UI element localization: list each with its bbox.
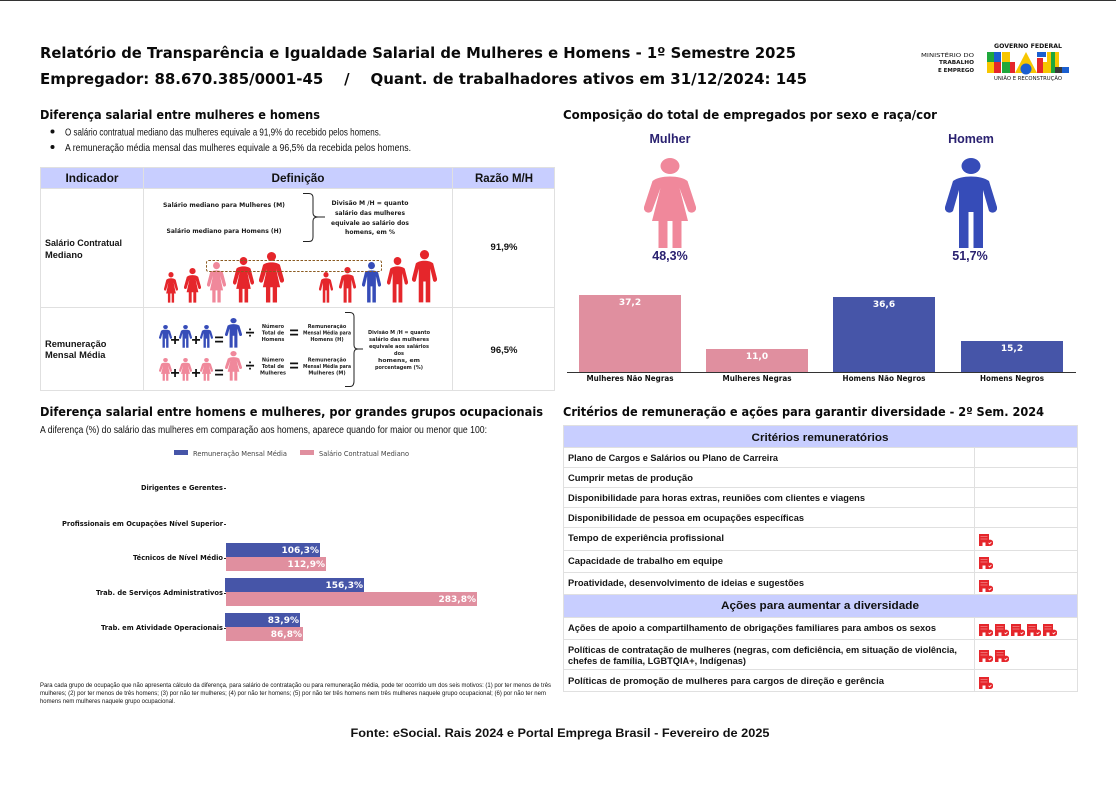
horizontal bar chart: grupos ocupacionais: 283,8%: [438, 595, 476, 605]
formula: remuneração média: Número: [262, 323, 285, 330]
heading: diferença salarial: Diferença salarial entre mulheres e homens: [40, 107, 320, 122]
bullet text block: A remuneração média mensal das mulheres equivale a 96,5% da recebida pelos homens.: [65, 143, 411, 154]
horizontal bar chart: grupos ocupacionais: [62, 484, 477, 641]
formula: remuneração média: +: [170, 332, 180, 349]
formula: remuneração média: +: [191, 365, 201, 382]
formula: remuneração média: =: [214, 332, 224, 349]
title: Empregador: 88.670.385/0001-45 / Quant. de trabalhadores ativos em 31/12/2024: 145: [40, 70, 807, 88]
panel: criteria table: Políticas de contratação de mulheres (negras, com deficiência, em situação de violência,: [568, 645, 957, 655]
bullet text block: O salário contratual mediano das mulheres equivale a 91,9% do recebido pelos homens.: [65, 128, 381, 138]
woman composition: Mulher: [650, 132, 691, 146]
horizontal bar chart: grupos ocupacionais: 112,9%: [288, 560, 325, 570]
heading: critérios: Critérios de remuneração e ações para garantir diversidade - 2º Sem. 2024: [563, 404, 1044, 419]
panel: indicator table: Remuneração: [45, 339, 107, 349]
definition text: salário mediano: homens, em %: [345, 229, 395, 236]
definition text: salário mediano: salário das mulheres: [335, 210, 405, 217]
horizontal bar chart: grupos ocupacionais: Técnicos de Nível Médio: [133, 554, 223, 562]
legend: Remuneração Mensal Média: [193, 450, 287, 458]
horizontal bar chart: grupos ocupacionais: Dirigentes e Gerentes: [141, 484, 223, 492]
panel: criteria table: Disponibilidade de pessoa em ocupações específicas: [568, 513, 804, 523]
heading: grupos ocupacionais: Diferença salarial entre homens e mulheres, por grandes grupos ocupacionais: [40, 404, 543, 419]
formula: remuneração média: =: [289, 325, 299, 342]
legend: Salário Contratual Mediano: [319, 450, 409, 458]
horizontal bar chart: grupos ocupacionais: Trab. de Serviços Administrativos: [96, 589, 223, 597]
formula: remuneração média: homens, em: [378, 358, 420, 364]
footnote: Para cada grupo de ocupação que não apresenta cálculo da diferença, para salário de contratação ou para remuneração média, pode ter ocorrido um dos seis motivos: (1) por ter menos de três: [40, 682, 552, 689]
bullet text block: [50, 128, 411, 154]
formula: remuneração média: +: [191, 332, 201, 349]
panel: criteria table: Plano de Cargos e Salários ou Plano de Carreira: [568, 453, 779, 463]
panel: criteria table: Proatividade, desenvolvimento de ideias e sugestões: [568, 578, 804, 588]
bar chart: sexo e raça: 37,2: [619, 298, 641, 308]
formula: remuneração média: salário das mulheres: [369, 336, 429, 343]
man composition: Homem: [948, 132, 994, 146]
formula: remuneração média: Mensal Média para: [303, 363, 351, 370]
footnote: [40, 682, 552, 705]
footnote: homens nem mulheres naquele grupo ocupacional.: [40, 698, 175, 705]
formula: remuneração média: [159, 312, 431, 386]
definition text: salário mediano: Divisão M /H = quanto: [332, 200, 408, 207]
bar chart: sexo e raça: Mulheres Negras: [722, 374, 792, 383]
definition text: salário mediano: equivale ao salário dos: [331, 220, 409, 227]
panel: indicator table: [40, 167, 555, 391]
panel: indicator table: Mensal Média: [45, 350, 106, 360]
woman composition: 48,3%: [652, 249, 688, 263]
panel: criteria table: [563, 425, 1078, 692]
formula: remuneração média: Número: [262, 356, 285, 364]
panel: criteria table: Políticas de promoção de mulheres para cargos de direção e gerência: [568, 676, 885, 686]
panel: criteria table: Capacidade de trabalho em equipe: [568, 556, 723, 566]
formula: remuneração média: Mulheres (M): [308, 370, 346, 376]
logo: ministério and governo federal: GOVERNO FEDERAL: [994, 43, 1062, 50]
panel: criteria table: Ações de apoio a compartilhamento de obrigações familiares para ambos os sexos: [568, 623, 936, 633]
definition text: salário mediano: Salário mediano para Homens (H): [166, 228, 282, 235]
panel: criteria table: Cumprir metas de produção: [568, 473, 693, 483]
panel: indicator table: Mediano: [45, 250, 83, 260]
bar chart: sexo e raça: Homens Negros: [980, 374, 1045, 383]
panel: indicator table: Definição: [272, 173, 324, 185]
panel: indicator table: 96,5%: [491, 345, 518, 356]
formula: remuneração média: Homens: [262, 337, 284, 343]
horizontal bar chart: grupos ocupacionais: 86,8%: [271, 630, 302, 640]
formula: remuneração média: Remuneração: [308, 358, 347, 364]
horizontal bar chart: grupos ocupacionais: Trab. em Atividade Operacionais: [101, 624, 223, 632]
formula: remuneração média: equivale aos salários: [369, 343, 429, 350]
horizontal bar chart: grupos ocupacionais: 156,3%: [326, 581, 363, 591]
bar chart: sexo e raça: Mulheres Não Negras: [586, 374, 674, 383]
title: [40, 44, 807, 88]
panel: criteria table: chefes de família, LGBTQIA+, Indígenas): [568, 656, 746, 666]
panel: indicator table: Salário Contratual: [45, 238, 122, 248]
woman composition: [644, 132, 696, 263]
footnote: mulheres; (2) por ter menos de três homens; (3) por não ter mulheres; (4) por não ter homens; (5) por não ter três homens nem três mulheres naquele grupo ocupacional; (6) por não ter nem: [40, 690, 546, 697]
logo: ministério and governo federal: E EMPREGO: [938, 68, 974, 74]
horizontal bar chart: grupos ocupacionais: 106,3%: [282, 546, 319, 556]
panel: indicator table: 91,9%: [491, 242, 518, 253]
bar chart: sexo e raça: 11,0: [746, 352, 768, 362]
bar chart: sexo e raça: Homens Não Negros: [842, 374, 926, 383]
panel: indicator table: Indicador: [66, 173, 119, 185]
horizontal bar chart: grupos ocupacionais: Profissionais em Ocupações Nível Superior: [62, 520, 224, 528]
formula: remuneração média: Divisão M /H = quanto: [368, 330, 431, 336]
formula: remuneração média: Total de: [262, 364, 285, 370]
formula: remuneração média: Total de: [262, 330, 285, 336]
title: Relatório de Transparência e Igualdade Salarial de Mulheres e Homens - 1º Semestre 2025: [40, 44, 796, 62]
icons: company marks: [979, 534, 1057, 689]
formula: remuneração média: ÷: [246, 358, 255, 375]
subheading text: A diferença (%) do salário das mulheres em comparação aos homens, aparece quando for maior ou menor que 100:: [40, 425, 487, 436]
logo: ministério and governo federal: [921, 43, 1069, 82]
panel: criteria table: Disponibilidade para horas extras, reuniões com clientes e viagens: [568, 493, 865, 503]
icon row: women and men ordered by salary: [164, 250, 437, 303]
source: Fonte: eSocial. Rais 2024 e Portal Emprega Brasil - Fevereiro de 2025: [350, 726, 770, 740]
formula: remuneração média: Remuneração: [308, 324, 347, 330]
bar chart: sexo e raça: 36,6: [873, 300, 895, 310]
panel: criteria table: Critérios remuneratórios: [752, 432, 888, 444]
formula: remuneração média: ÷: [246, 325, 255, 342]
man composition: 51,7%: [952, 249, 988, 263]
definition text: salário mediano: Salário mediano para Mulheres (M): [163, 202, 285, 209]
logo: ministério and governo federal: UNIÃO E RECONSTRUÇÃO: [994, 75, 1062, 82]
panel: criteria table: Ações para aumentar a diversidade: [721, 600, 919, 612]
panel: criteria table: Tempo de experiência profissional: [568, 533, 724, 543]
formula: remuneração média: porcentagem (%): [375, 365, 423, 371]
bar chart: sexo e raça: [567, 295, 1076, 383]
heading: composição: Composição do total de empregados por sexo e raça/cor: [563, 107, 938, 122]
panel: indicator table: Razão M/H: [475, 173, 533, 185]
legend: [174, 450, 409, 458]
bar chart: sexo e raça: 15,2: [1001, 344, 1023, 354]
formula: remuneração média: Mulheres: [260, 370, 286, 376]
formula: remuneração média: =: [289, 358, 299, 375]
horizontal bar chart: grupos ocupacionais: 83,9%: [268, 616, 299, 626]
definition text: salário mediano: [163, 194, 409, 242]
formula: remuneração média: dos: [394, 351, 404, 357]
page top rule: [0, 0, 1116, 1]
man composition: [945, 132, 997, 263]
formula: remuneração média: Homens (H): [310, 337, 344, 343]
formula: remuneração média: +: [170, 365, 180, 382]
logo: ministério and governo federal: MINISTÉRIO DO: [921, 51, 975, 59]
logo: ministério and governo federal: TRABALHO: [939, 60, 974, 66]
formula: remuneração média: Mensal Média para: [303, 330, 351, 336]
formula: remuneração média: =: [214, 365, 224, 382]
